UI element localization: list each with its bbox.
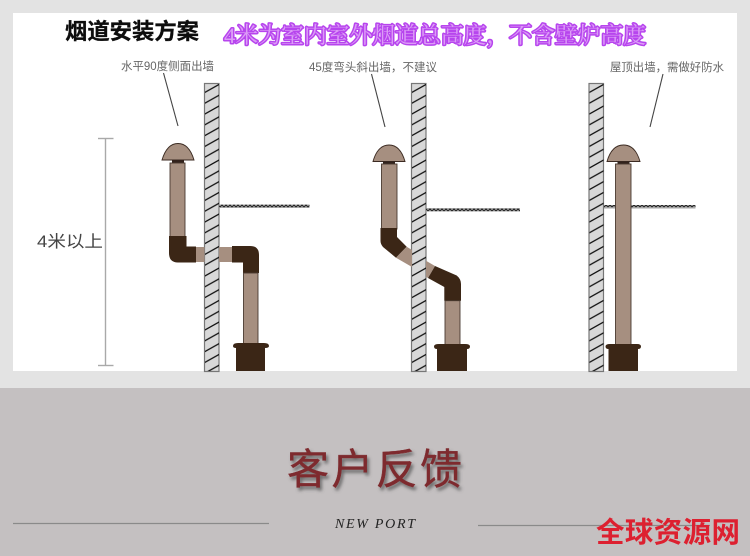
wall	[589, 84, 604, 372]
label: horizontal 90 degree: 水平90度侧面出墙	[121, 59, 214, 73]
cap	[607, 145, 640, 162]
stove collar	[606, 344, 641, 371]
wall	[204, 84, 219, 372]
lower pipe	[445, 301, 460, 345]
label: roof exit: 屋顶出墙，需做好防水	[610, 60, 724, 74]
upper pipe	[382, 164, 397, 229]
highlighted note: 4米为室内室外烟道总高度，不含壁炉高度	[224, 23, 646, 49]
right rule	[478, 524, 710, 526]
watermark: 全球资源网	[596, 517, 740, 549]
pipe	[616, 164, 631, 345]
bottom band	[0, 388, 750, 556]
leader line	[650, 74, 663, 127]
title: 烟道安装方案	[65, 18, 199, 44]
outer elbow	[232, 246, 259, 273]
lower pipe	[244, 273, 258, 344]
diagram 3: roof exit	[589, 60, 724, 372]
shelf	[426, 208, 520, 212]
upper pipe	[170, 163, 185, 237]
shelf	[604, 205, 696, 208]
cap	[373, 145, 405, 162]
section heading: customer feedback: 客户反馈	[287, 436, 462, 497]
wall sleeve right	[219, 247, 232, 262]
collar	[618, 162, 630, 166]
lower elbow	[428, 266, 461, 301]
cap	[162, 144, 194, 160]
leader line	[372, 74, 385, 127]
white diagram panel	[13, 13, 737, 371]
diagram 1: horizontal 90 degree side exit	[121, 59, 310, 372]
height dimension: 4 metres: 4米以上	[37, 232, 103, 251]
leader line	[164, 73, 178, 126]
wall sleeve right	[426, 261, 435, 278]
subtitle: NEW PORT	[334, 517, 416, 532]
shelf	[219, 204, 310, 208]
label: 45 degree: 45度弯头斜出墙，不建议	[309, 60, 437, 74]
stove collar	[434, 344, 470, 371]
stove collar	[233, 343, 269, 371]
collar	[172, 160, 184, 164]
wall sleeve left	[196, 247, 204, 262]
inner elbow	[169, 236, 196, 262]
collar	[383, 162, 395, 166]
wall sleeve left	[396, 247, 412, 267]
left rule	[13, 522, 269, 524]
upper elbow	[380, 228, 407, 258]
wall	[412, 84, 426, 372]
top background	[0, 0, 750, 388]
diagram 2: 45 degree elbow exit	[309, 60, 520, 372]
